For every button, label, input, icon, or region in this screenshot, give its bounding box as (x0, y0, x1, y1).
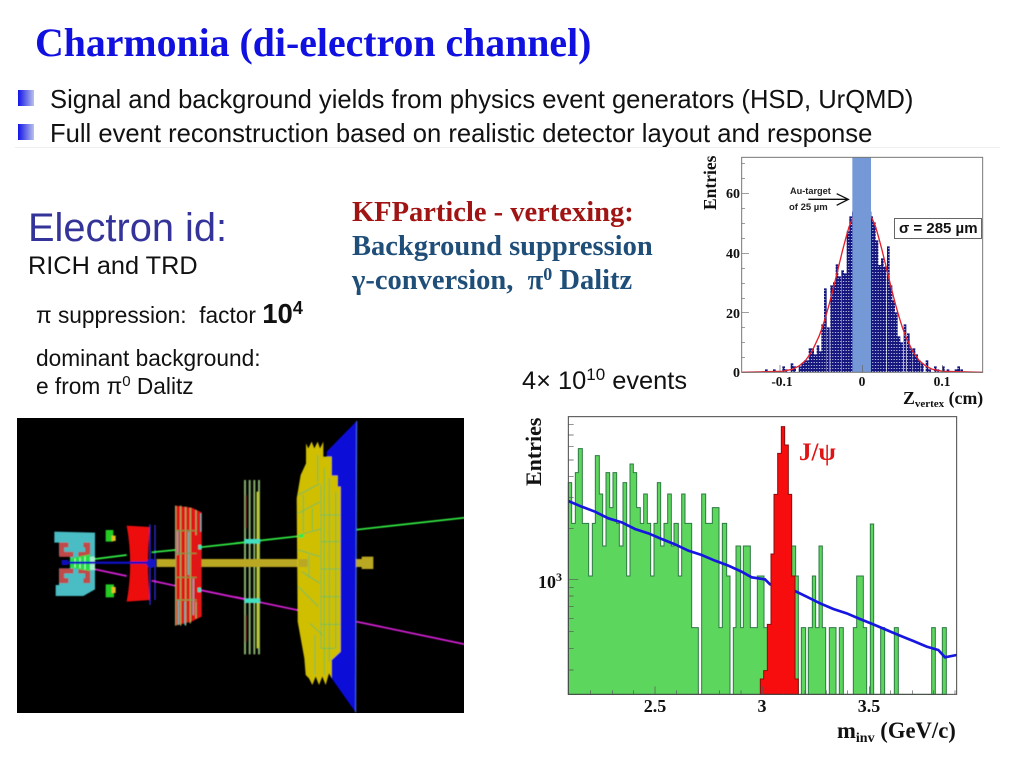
events label: events (605, 367, 687, 395)
beam pipe (157, 559, 248, 567)
bullet text 1: Signal and background yields from physics event generators (HSD, UrQMD) (50, 86, 913, 114)
y axis labels: 20 (726, 307, 740, 322)
y axis title: Entries (521, 417, 546, 486)
label: J/psi: J/ψ (799, 439, 836, 466)
TRD (175, 506, 202, 626)
x axis labels: 3.5 (858, 696, 880, 716)
x axis labels: 3 (758, 696, 766, 716)
x axis labels (771, 374, 951, 389)
dalitz note: Dalitz (131, 373, 194, 399)
green background-subtracted histogram (568, 449, 946, 694)
sigma box: σ = 285 µm (899, 220, 978, 237)
annotation: au-target: Au-target (790, 186, 831, 196)
tracking stations (245, 480, 259, 654)
pion suppression line: 4 (293, 298, 303, 318)
x axis title: vertex (915, 398, 945, 410)
beam axis (68, 560, 148, 565)
gaussian fit curve (742, 217, 983, 372)
icon: bullet 2 (18, 124, 34, 140)
x axis title: Z (903, 388, 915, 408)
y axis labels: 60 (726, 187, 740, 202)
conversion line: γ-conversion, π (352, 265, 543, 296)
annotation: target thickness: of 25 µm (789, 202, 828, 213)
pion suppression line: π suppression: factor 10 (36, 298, 293, 329)
small green detector boxes (106, 530, 114, 597)
conversion line: 0 (543, 264, 552, 284)
dominant background note: dominant background: (36, 345, 261, 371)
x axis labels: -0.1 (771, 374, 793, 389)
heading: electron id: Electron id: (28, 206, 227, 250)
axis frame (568, 417, 957, 694)
ticks (742, 163, 942, 372)
image: detector layout (17, 418, 465, 713)
dalitz note: e from π (36, 373, 122, 399)
x axis title: (cm) (944, 388, 983, 409)
arrow: target pointer (808, 194, 848, 205)
y axis labels: 0 (733, 366, 740, 381)
y axis label: 3 (556, 570, 562, 584)
conversion line: Dalitz (552, 265, 633, 296)
yellow wall (297, 442, 341, 685)
sub-heading: detectors: RICH and TRD (28, 252, 198, 280)
chart: invariant mass spectrum (521, 417, 957, 746)
tracks (235, 518, 465, 543)
heading: KFParticle: KFParticle - vertexing: (352, 197, 634, 228)
events label: 4× 10 (522, 367, 586, 395)
detector right half (235, 421, 465, 712)
icon: bullet 1 (18, 90, 34, 106)
blue calorimeter plane (327, 421, 357, 712)
text block: KFParticle (351, 197, 653, 296)
dalitz note: 0 (122, 373, 131, 390)
events label: 10 (586, 365, 605, 384)
RICH detector (127, 526, 150, 602)
beam pipe (235, 559, 307, 567)
blue background curve (568, 501, 957, 657)
x axis title: m (837, 718, 856, 743)
bullet list (18, 86, 913, 148)
x axis labels (644, 696, 880, 716)
magnet (54, 532, 95, 596)
y axis label: 10 (538, 572, 556, 592)
red J/psi peak (760, 427, 798, 694)
target band (852, 157, 871, 372)
background suppression line: Background suppression (352, 231, 653, 262)
x axis labels: 2.5 (644, 696, 666, 716)
text block: electron id (28, 206, 303, 399)
chart: z vertex histogram (700, 155, 983, 410)
y axis labels: 40 (726, 247, 740, 262)
y axis title: Entries (700, 155, 720, 210)
ticks (568, 424, 955, 694)
x axis title: inv (856, 731, 875, 746)
x axis labels: 0 (859, 374, 866, 389)
y axis labels (726, 187, 740, 381)
x axis title: (GeV/c) (875, 718, 956, 743)
bullet text 2: Full event reconstruction based on realistic detector layout and response (50, 120, 872, 148)
histogram bars (766, 212, 962, 372)
detector left half (54, 506, 248, 626)
tracks left (95, 542, 248, 559)
x axis labels: 0.1 (934, 374, 951, 389)
beam dump plug (356, 557, 373, 569)
title: Charmonia (di-electron channel) (35, 21, 591, 65)
axis frame (742, 157, 983, 372)
